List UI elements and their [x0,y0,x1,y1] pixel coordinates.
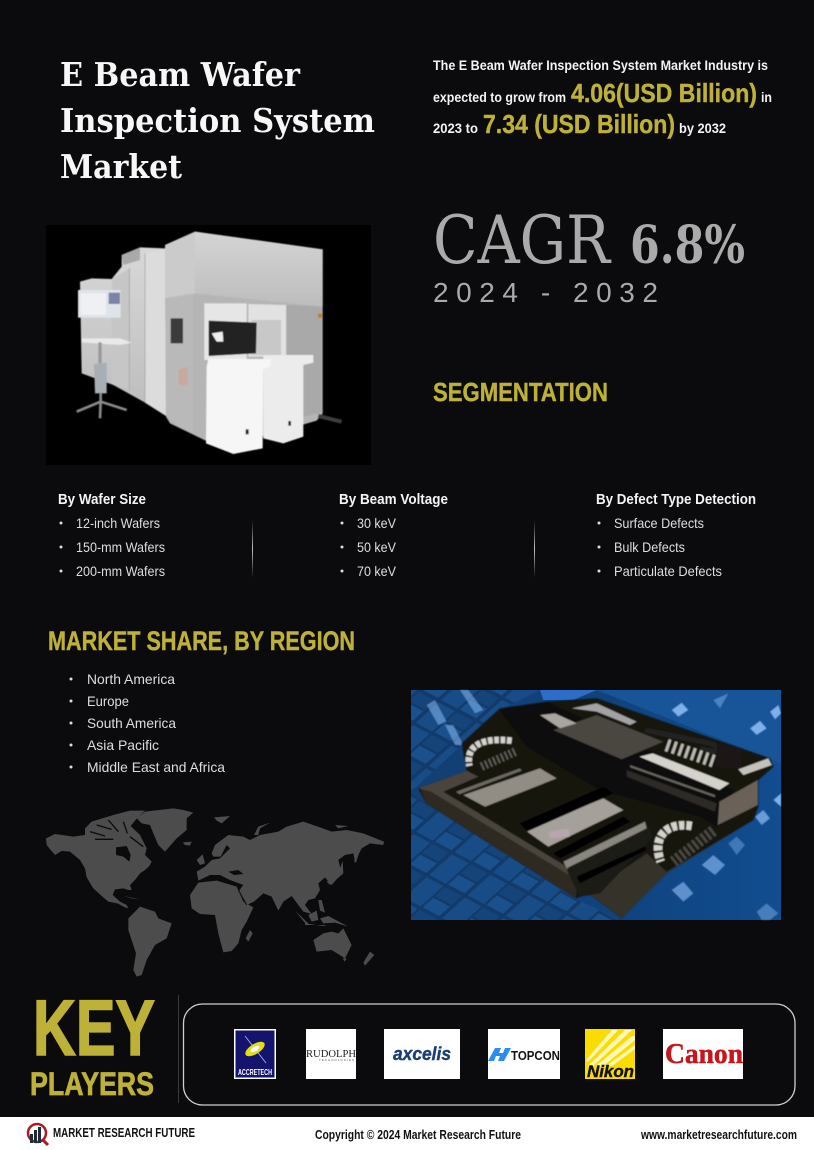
segment column: wafer size: 12-inch Wafers [76,515,160,531]
stage: lower base plate [588,820,753,918]
region list: Asia Pacific [87,737,159,753]
market growth summary: The E Beam Wafer Inspection System Market Industry is [433,57,768,73]
stage: gantry [500,702,733,827]
logo: Rudolph: TECHNOLOGIES [319,1058,354,1062]
segment column: beam voltage: By Beam Voltage [339,491,448,508]
heading: key players [30,983,155,1102]
heading: market share by region: MARKET SHARE, BY REGION [48,626,355,656]
segment column: wafer size: 200-mm Wafers [76,563,165,579]
logo: Accretech: ACCRETECH [238,1068,272,1077]
segment column: beam voltage [339,491,448,579]
region list: Europe [87,693,129,709]
region list: Middle East and Africa [87,759,225,775]
CAGR figure: 2024 - 2032 [433,277,658,308]
market growth summary: in [761,89,772,105]
market growth summary: 4.06(USD Billion) [571,78,757,108]
stage: blue chip pattern [411,690,781,920]
stage: left cable chain [469,740,512,766]
market growth summary: expected to grow from [433,89,566,105]
logo: Rudolph [306,1029,356,1079]
heading: key players: PLAYERS [30,1066,154,1102]
market growth summary: by 2032 [679,120,726,136]
segment column: wafer size: By Wafer Size [58,491,146,508]
region list: South America [87,715,176,731]
image: precision wafer stage [411,690,781,920]
logo: Accretech [234,1029,276,1079]
logo: Topcon: TOPCON [511,1048,560,1063]
logo: Axcelis: axcelis [393,1044,451,1064]
market growth summary [433,57,772,139]
stage: front wall [420,788,578,898]
CAGR figure [433,202,745,308]
CAGR figure: 6.8% [630,215,745,276]
machine: white pedestals [263,355,313,443]
title: E Beam Wafer [60,55,301,94]
logo: Nikon: Nikon [587,1062,634,1081]
title: Market [60,147,183,186]
title: Inspection System [60,101,375,140]
market growth summary: 7.34 (USD Billion) [483,109,675,139]
machine: load ports [204,303,247,360]
footer bar [0,1117,814,1150]
segment column: defect type detection [596,491,756,579]
footer brand name: MARKET RESEARCH FUTURE [53,1126,195,1140]
logo: Canon [663,1029,743,1079]
market growth summary: 2023 to [433,120,478,136]
CAGR figure: CAGR [433,202,612,279]
title [60,55,375,186]
machine: main housing [165,232,323,448]
stage: silver motor plates [463,768,557,807]
region list: North America [87,671,175,687]
stage: dark frame [418,698,773,918]
segment column: beam voltage: 70 keV [357,563,397,579]
segment column: defect type detection: Particulate Defects [614,563,722,579]
machine: monitor cart [78,290,121,318]
stage: centre plate [553,715,663,759]
stage: lower cable chain [658,825,692,862]
region list [70,671,225,775]
logo: Topcon [488,1029,560,1079]
logo: Rudolph: RUDOLPH [306,1048,356,1060]
footer logo icon [28,1124,48,1145]
image: inspection machine [46,225,371,465]
world map [46,808,384,977]
segment column: wafer size [58,491,165,579]
segment column: beam voltage: 30 keV [357,515,397,531]
segment column: defect type detection: Surface Defects [614,515,704,531]
segment column: defect type detection: By Defect Type Detection [596,491,756,508]
machine: left cabinets [80,247,167,417]
segment column: defect type detection: Bulk Defects [614,539,685,555]
logo: Axcelis [384,1029,460,1079]
stage: upper right cable chain [645,730,719,751]
panel: key player logos [184,1004,795,1105]
stage: end block [718,780,758,825]
footer copyright: Copyright © 2024 Market Research Future [315,1128,521,1142]
logo: Canon: Canon [665,1039,743,1070]
heading: key players: KEY [33,983,155,1072]
segment column: beam voltage: 50 keV [357,539,397,555]
logo: Nikon [585,1029,635,1081]
segment column: wafer size: 150-mm Wafers [76,539,165,555]
heading: segmentation: SEGMENTATION [433,377,608,407]
